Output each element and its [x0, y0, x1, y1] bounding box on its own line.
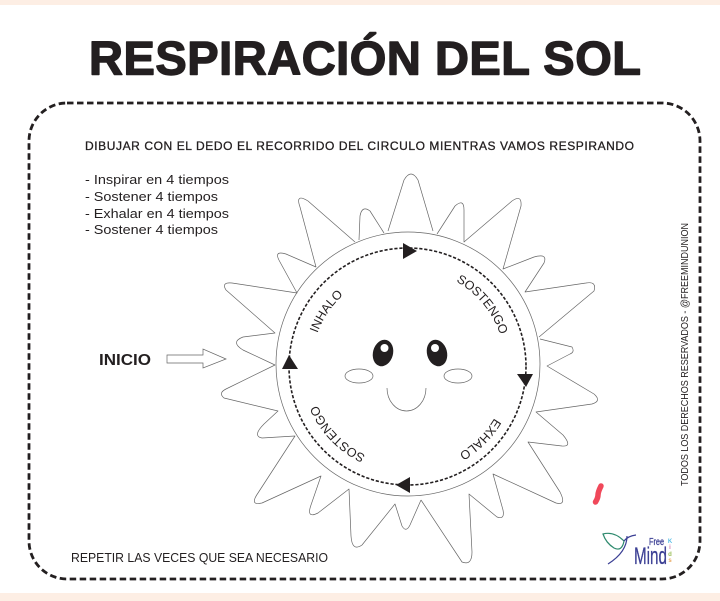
breathing steps list: - Sostener 4 tiempos: [85, 223, 218, 237]
breathing steps list: - Inspirar en 4 tiempos: [85, 173, 229, 187]
curved labels: [310, 275, 507, 462]
logo kids letters: K: [668, 539, 673, 545]
start label: INICIO: [99, 352, 151, 369]
logo kids letters: s: [668, 558, 672, 564]
curved labels: SOSTENGO: [457, 275, 507, 333]
logo wordmark: Mind: [634, 543, 667, 570]
sun illustration: [221, 174, 598, 564]
breathing steps list: [85, 173, 229, 237]
curved labels: SOSTENGO: [311, 406, 364, 462]
repeat note: REPETIR LAS VECES QUE SEA NECESARIO: [71, 551, 328, 565]
curved labels: EXHALO: [461, 418, 502, 459]
breathing steps list: - Exhalar en 4 tiempos: [85, 207, 229, 221]
arrow: start pointer: [167, 349, 226, 368]
title: RESPIRACIÓN DEL SOL: [89, 32, 641, 84]
sun outer circle: [276, 232, 540, 496]
dashed rounded frame: [29, 103, 700, 579]
logo kids letters: d: [668, 552, 672, 558]
sun face: [345, 337, 472, 411]
copyright vertical text: TODOS LOS DERECHOS RESERVADOS - @FREEMINDUNION: [679, 223, 691, 486]
red mark: [596, 486, 601, 502]
logo kids letters: [668, 539, 673, 564]
instruction heading: DIBUJAR CON EL DEDO EL RECORRIDO DEL CIRCULO MIENTRAS VAMOS RESPIRANDO: [85, 139, 634, 153]
dashed breathing path: [289, 248, 526, 485]
logo wordmark: Free: [649, 537, 664, 548]
breathing steps list: - Sostener 4 tiempos: [85, 190, 218, 204]
logo bird: [603, 533, 636, 564]
sun rays: [221, 174, 598, 563]
curved labels: INHALO: [310, 290, 342, 332]
logo kids letters: i: [669, 545, 671, 551]
logo wordmark: [634, 537, 667, 570]
logo: Free Mind Kids: [603, 533, 673, 570]
direction arrowheads: [282, 243, 533, 493]
